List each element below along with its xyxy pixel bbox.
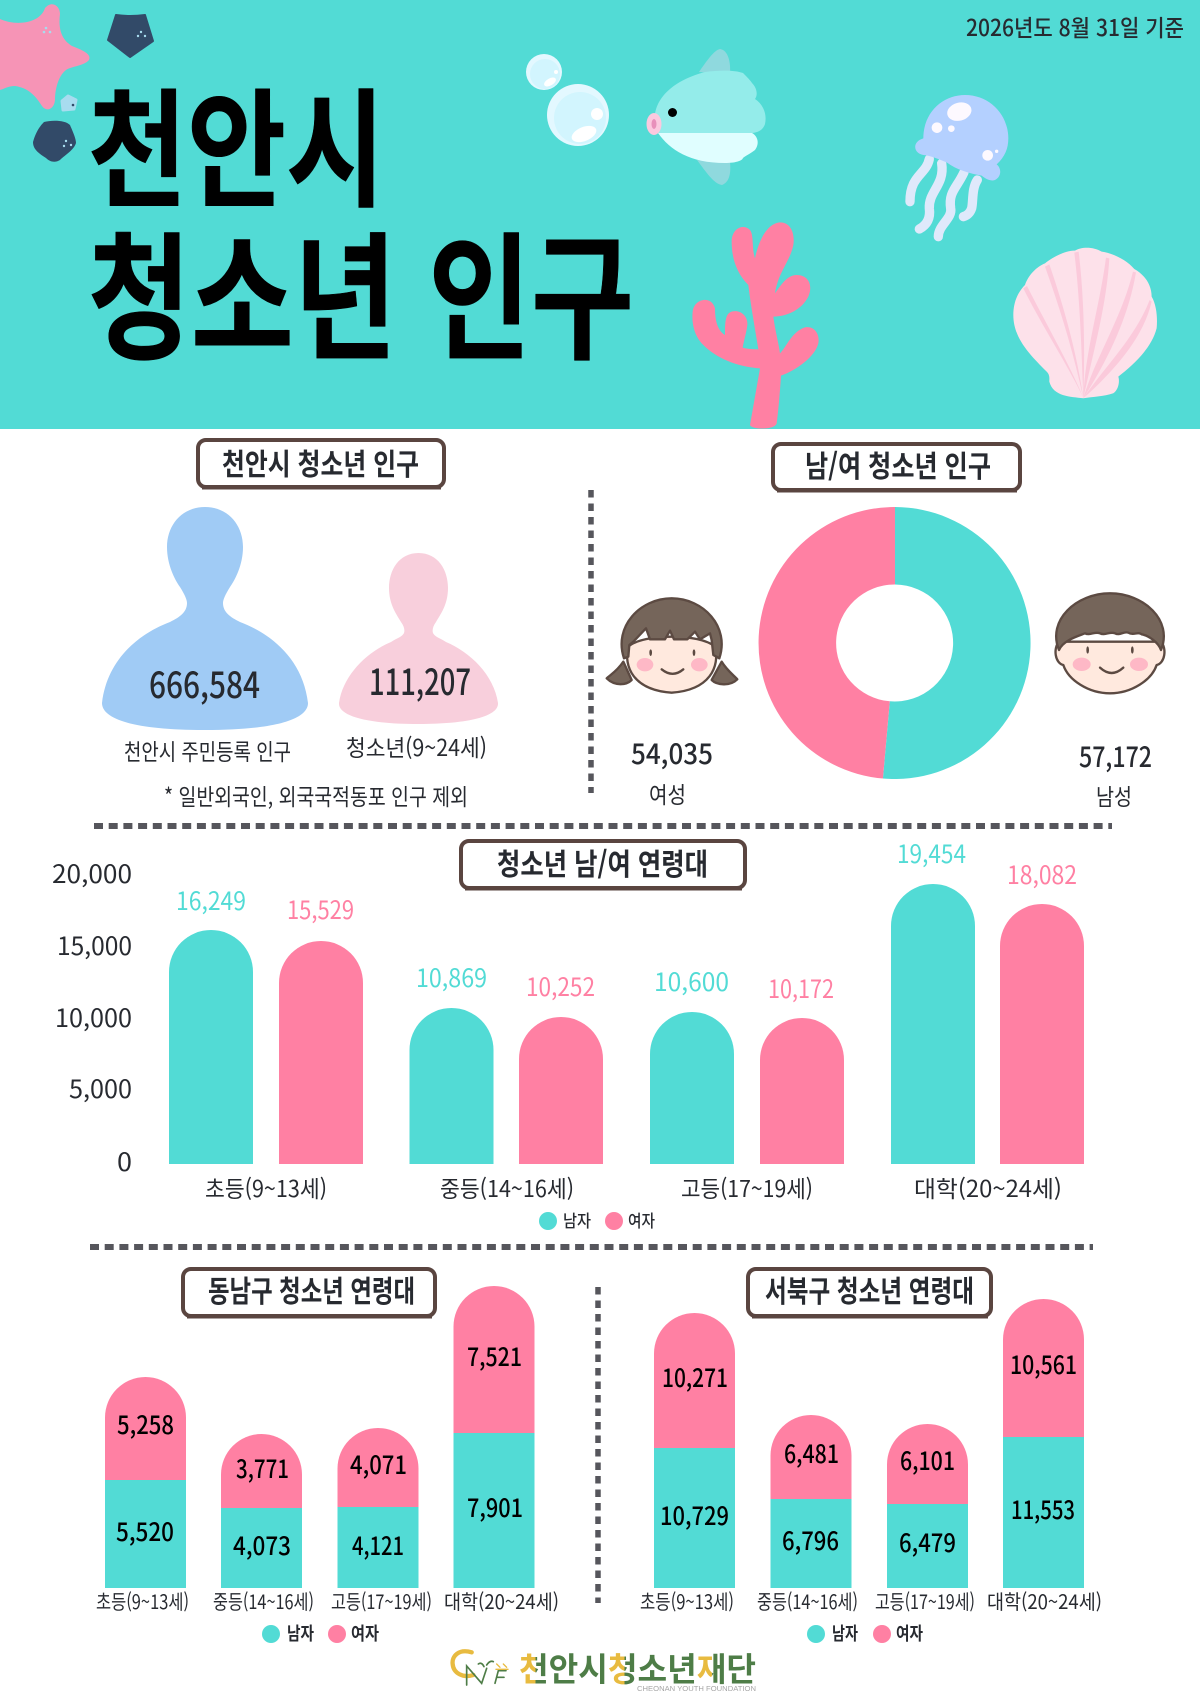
heading: Dongnam-gu <box>183 1267 435 1317</box>
stacked values: 10,729 <box>660 1497 729 1533</box>
stacked bar chart <box>105 1286 534 1588</box>
female count: 54,035 <box>631 733 713 773</box>
male count: 57,172 <box>1079 736 1152 776</box>
icon: navy starfish lower <box>33 121 76 162</box>
legend <box>262 1620 379 1646</box>
stacked values <box>116 1338 523 1563</box>
x axis categories <box>205 1170 1062 1204</box>
icon: girl face <box>607 598 737 693</box>
stacked values: 5,520 <box>116 1513 174 1549</box>
icon: navy starfish top <box>108 15 153 57</box>
youth population number: 111,207 <box>369 654 471 706</box>
y axis labels: 0 <box>117 1143 132 1179</box>
bar values: 10,600 <box>654 963 729 999</box>
x axis categories: 초등(9~13세) <box>640 1586 734 1615</box>
legend: 여자 <box>351 1620 379 1646</box>
bar values: 16,249 <box>176 882 246 918</box>
x axis categories: 대학(20~24세) <box>914 1170 1062 1204</box>
stacked values: 5,258 <box>117 1406 174 1442</box>
panel: Cheonan youth population <box>102 440 498 812</box>
bar values <box>176 835 1077 1006</box>
legend: 남자 <box>563 1207 591 1232</box>
x axis categories <box>96 1586 559 1615</box>
icon: coral <box>692 222 819 429</box>
stacked values: 6,479 <box>899 1524 956 1560</box>
female label: 여성 <box>649 776 686 810</box>
stacked bar chart <box>654 1299 1084 1588</box>
bar values: 19,454 <box>897 835 966 871</box>
legend <box>539 1207 655 1232</box>
stacked values: 7,521 <box>467 1338 522 1374</box>
stacked values: 10,561 <box>1010 1346 1077 1382</box>
x axis categories: 초등(9~13세) <box>205 1170 327 1204</box>
panel: youth gender by age group <box>52 835 1084 1232</box>
legend: 남자 <box>832 1620 858 1646</box>
icon: pink starfish <box>0 4 90 109</box>
icon: pink person silhouette <box>339 553 498 724</box>
x axis categories: 중등(14~16세) <box>213 1586 314 1615</box>
stacked values: 11,553 <box>1011 1491 1075 1527</box>
panel: Seobuk-gu age groups <box>640 1267 1102 1646</box>
stacked values: 7,901 <box>467 1489 523 1525</box>
heading: Dongnam-gu: 동남구 청소년 연령대 <box>208 1267 415 1311</box>
stacked values: 4,071 <box>350 1446 407 1482</box>
stacked values: 6,481 <box>784 1435 839 1471</box>
logo subtitle: CHEONAN YOUTH FOUNDATION <box>637 1686 756 1693</box>
legend: 여자 <box>896 1620 923 1646</box>
heading: Seobuk-gu: 서북구 청소년 연령대 <box>765 1267 974 1311</box>
icon: logo mark <box>453 1651 508 1685</box>
male label: 남성 <box>1096 778 1132 812</box>
label: registered population: 천안시 주민등록 인구 <box>124 733 291 767</box>
x axis categories: 고등(17~19세) <box>681 1170 813 1204</box>
icon: jellyfish <box>910 95 1008 237</box>
logo wordmark: 천안시청소년재단 <box>519 1643 756 1691</box>
y axis labels: 5,000 <box>69 1070 132 1106</box>
x axis categories <box>640 1586 1102 1615</box>
icon: blue person silhouette <box>102 507 308 730</box>
title <box>88 48 634 388</box>
stacked values: 6,101 <box>900 1442 955 1478</box>
stacked values: 4,073 <box>233 1527 291 1563</box>
bar chart <box>169 884 1084 1164</box>
total population number: 666,584 <box>149 657 260 709</box>
bar values: 18,082 <box>1007 856 1077 892</box>
date note: 2026년도 8월 31일 기준 <box>966 9 1184 43</box>
x axis categories: 대학(20~24세) <box>987 1586 1102 1615</box>
x axis categories: 초등(9~13세) <box>96 1586 189 1615</box>
stacked values: 4,121 <box>352 1527 404 1563</box>
title: 청소년 인구 <box>88 188 634 388</box>
stacked values <box>660 1346 1077 1560</box>
panel: male and female population <box>607 442 1164 812</box>
stacked values: 10,271 <box>662 1359 728 1395</box>
bar values: 10,172 <box>768 970 834 1006</box>
x axis categories: 중등(14~16세) <box>757 1586 858 1615</box>
stacked values: 6,796 <box>782 1522 839 1558</box>
x axis categories: 고등(17~19세) <box>331 1586 432 1615</box>
logo: Cheonan Youth Foundation <box>453 1643 756 1693</box>
panel: header banner <box>0 0 1200 429</box>
panel: Dongnam-gu age groups <box>96 1267 559 1646</box>
y axis labels: 15,000 <box>57 927 132 963</box>
legend: 남자 <box>287 1620 314 1646</box>
icon: sunfish <box>646 49 766 185</box>
bar values: 10,869 <box>416 959 487 995</box>
icon: boy face <box>1056 593 1164 693</box>
legend <box>807 1620 923 1646</box>
footnote: * 일반외국인, 외국국적동포 인구 제외 <box>164 778 468 812</box>
icon: bubbles <box>526 54 609 146</box>
legend: 여자 <box>628 1207 655 1232</box>
title: 천안시 <box>88 48 385 233</box>
label: youth age: 청소년(9~24세) <box>346 729 487 763</box>
x axis categories: 중등(14~16세) <box>440 1170 574 1204</box>
x axis categories: 고등(17~19세) <box>875 1586 975 1615</box>
bar values: 10,252 <box>526 968 595 1004</box>
y axis labels: 20,000 <box>52 855 132 891</box>
heading: age group: 청소년 남/여 연령대 <box>497 840 708 884</box>
y axis labels: 10,000 <box>55 999 132 1035</box>
icon: small blue star <box>62 96 76 110</box>
heading: population: 천안시 청소년 인구 <box>222 440 419 484</box>
heading: gender: 남/여 청소년 인구 <box>805 442 991 486</box>
donut chart <box>759 507 1031 779</box>
stacked values: 3,771 <box>236 1450 289 1486</box>
x axis categories: 대학(20~24세) <box>444 1586 559 1615</box>
y axis labels <box>52 855 132 1179</box>
bar values: 15,529 <box>287 891 354 927</box>
icon: seashell <box>1013 248 1157 398</box>
